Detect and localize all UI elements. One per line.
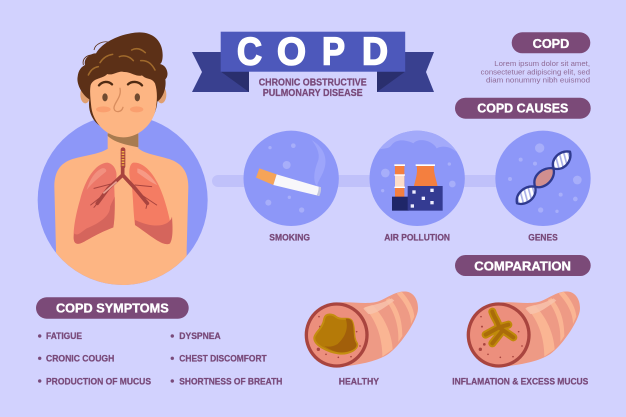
heading pill: COPD (512, 32, 590, 53)
curly hair outline (83, 42, 110, 65)
hair back (77, 32, 168, 127)
labels: comparison (339, 377, 588, 387)
symptoms list: DYSPNEA (179, 331, 221, 341)
title: P (322, 30, 345, 74)
title banner (192, 30, 434, 99)
labels: comparison: HEALTHY (339, 377, 379, 387)
text block: lorem ipsum: Lorem ipsum dolor sit amet, (494, 59, 590, 68)
subtitle: PULMONARY DISEASE (263, 88, 363, 99)
eyes (102, 93, 140, 101)
face (90, 72, 157, 137)
bronchi (91, 167, 157, 208)
title: O (277, 30, 306, 74)
left lung (74, 163, 117, 244)
right lung (129, 163, 172, 244)
cheeks (96, 106, 143, 112)
subtitle (259, 77, 367, 99)
labels: comparison: INFLAMATION & EXCESS MUCUS (452, 377, 588, 387)
icon: cigarette (243, 131, 339, 226)
heading pill: COPD causes: COPD CAUSES (477, 101, 568, 115)
nose (114, 88, 123, 112)
icon: factory (369, 125, 467, 226)
labels: causes: SMOKING (269, 232, 310, 242)
symptoms list: CRONIC COUGH (46, 354, 114, 364)
ribbon main (221, 32, 405, 72)
labels: causes: AIR POLLUTION (384, 232, 450, 242)
connector bar (212, 175, 512, 187)
body (54, 148, 188, 287)
title: C (237, 30, 262, 74)
symptoms list: PRODUCTION OF MUCUS (46, 377, 151, 387)
title (237, 30, 388, 74)
labels: causes: GENES (528, 232, 558, 242)
symptoms list: SHORTNESS OF BREATH (179, 377, 282, 387)
eyebrows (99, 82, 142, 85)
symptoms list: FATIGUE (46, 331, 82, 341)
heading pill: COPD causes (455, 98, 591, 119)
neck (108, 127, 138, 153)
illustration: person with lungs (38, 32, 208, 287)
background circle (38, 115, 208, 285)
bronchus: inflamed (467, 292, 580, 368)
title: D (362, 30, 388, 74)
heading pill: COPD: COPD (533, 37, 569, 51)
symptoms list (38, 331, 282, 387)
neck shadow (108, 133, 138, 147)
text block: lorem ipsum: consectetuer adipiscing elit, sed (481, 67, 590, 76)
hair highlights (88, 49, 155, 75)
heading pill: symptoms (36, 297, 189, 319)
cause icons (243, 125, 591, 226)
bronchus: healthy (305, 292, 418, 368)
ribbon tail right (377, 52, 434, 92)
icon: DNA (495, 131, 591, 226)
symptoms list: CHEST DISCOMFORT (179, 354, 267, 364)
ribbon tail left (192, 52, 249, 92)
text block: lorem ipsum (481, 59, 590, 84)
trachea (121, 147, 125, 169)
comparison bronchi (305, 292, 580, 368)
text block: lorem ipsum: diam nonummy nibh euismod (486, 75, 590, 84)
heading pill: comparation: COMPARATION (474, 260, 571, 274)
heading pill: symptoms: COPD SYMPTOMS (56, 302, 169, 316)
heading pill: comparation (455, 255, 591, 276)
labels: causes (269, 232, 558, 242)
ears (80, 86, 166, 103)
subtitle: CHRONIC OBSTRUCTIVE (259, 77, 367, 88)
